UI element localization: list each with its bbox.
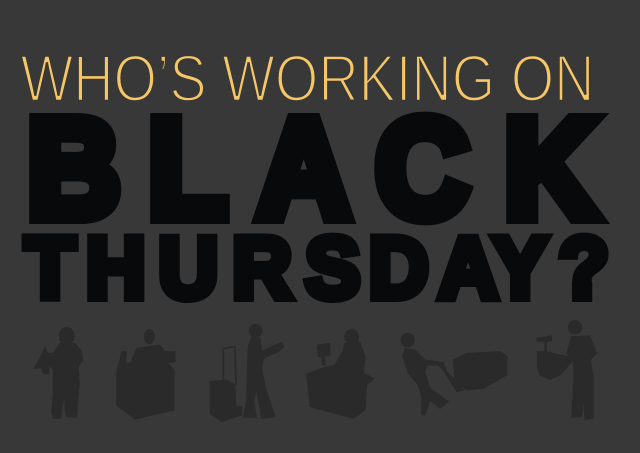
silhouette: worker with hand truck	[210, 324, 284, 422]
title word: thursday: THURSDAY?	[25, 220, 609, 316]
silhouette: worker carrying basket	[537, 321, 597, 419]
silhouette: worker holding toy	[34, 327, 83, 418]
title word: black: BLACK	[27, 90, 597, 247]
silhouette: worker pulling pallet jack	[401, 333, 507, 415]
silhouette: cashier behind counter	[117, 330, 175, 419]
silhouette: cashier at register	[307, 330, 374, 418]
